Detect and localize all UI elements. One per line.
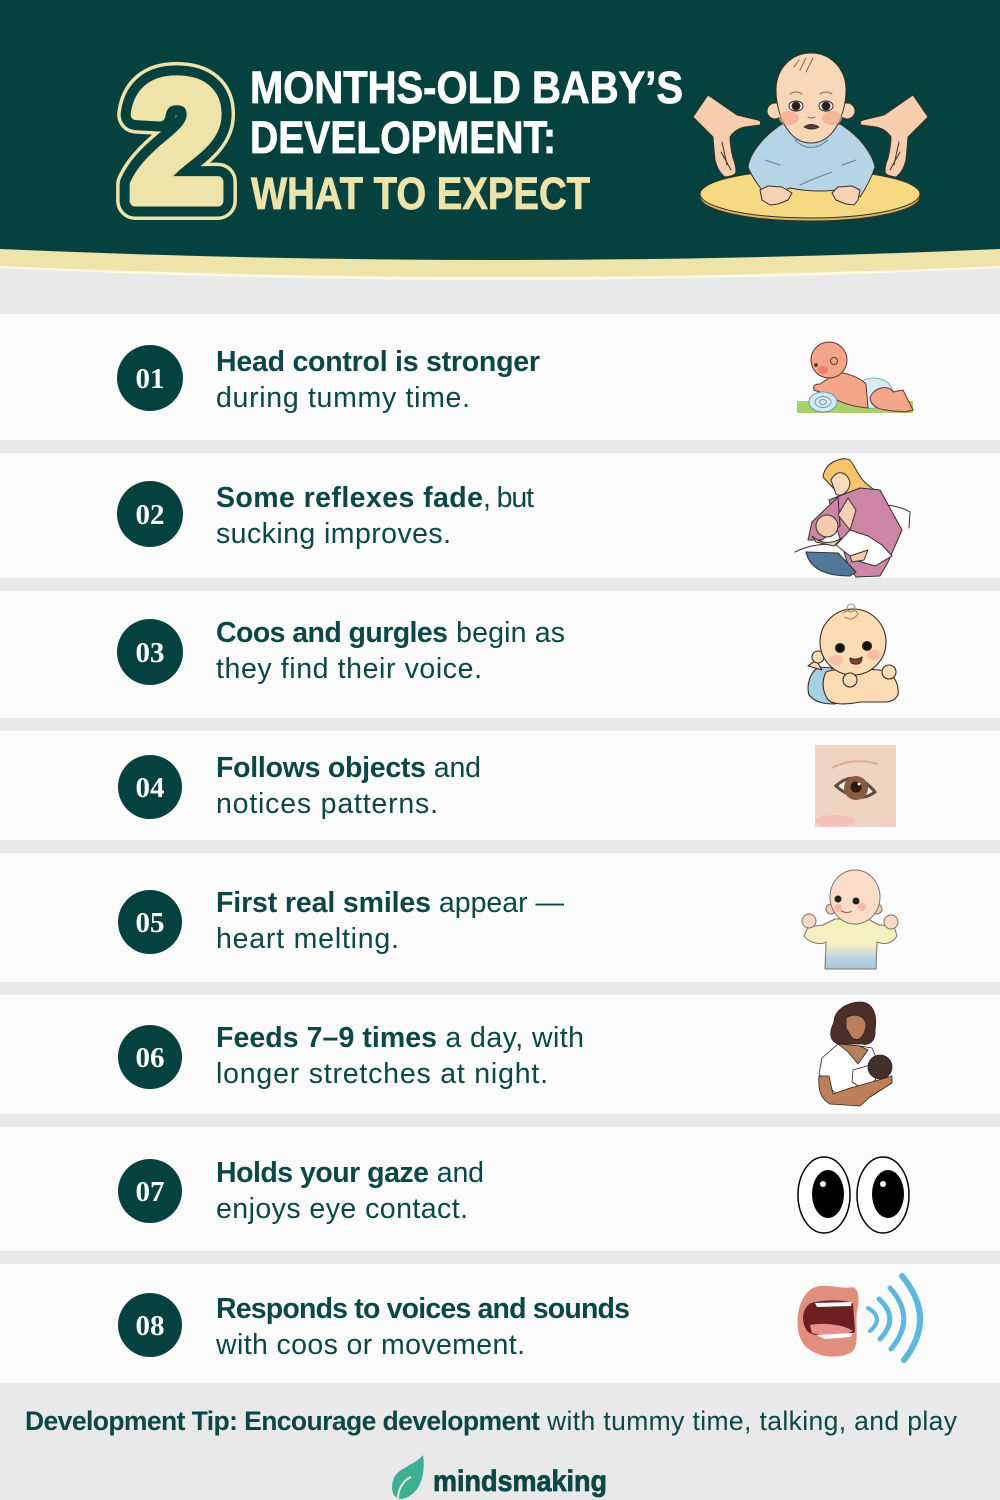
title xyxy=(250,62,683,219)
badge 04 xyxy=(118,755,182,819)
text 8: with coos or movement. xyxy=(215,1329,525,1361)
item 8 xyxy=(0,1264,1000,1383)
logo: mindsmaking xyxy=(392,1455,607,1499)
icon: open mouth with sound waves xyxy=(798,1276,920,1360)
development tip: Development Tip: Encourage development xyxy=(25,1406,540,1436)
text 4: and xyxy=(426,752,481,784)
big number 2: 2 xyxy=(129,46,225,238)
item 6 xyxy=(0,995,1000,1114)
text 5: appear — xyxy=(431,887,564,919)
text 7: and xyxy=(429,1157,484,1189)
badge 03 xyxy=(117,619,183,685)
item 7 xyxy=(0,1127,1000,1251)
logo: mindsmaking: mindsmaking xyxy=(433,1465,607,1498)
icon: cooing baby xyxy=(808,604,898,704)
badge 06: 06 xyxy=(136,1042,164,1074)
badge 02 xyxy=(117,481,183,547)
item 1 xyxy=(0,314,1000,440)
text 1: Head control is stronger xyxy=(216,346,540,378)
icon: cartoon eyes xyxy=(798,1157,909,1233)
big number 2: 2 xyxy=(129,46,225,238)
text 8: Responds to voices and sounds xyxy=(216,1293,630,1325)
item 2 xyxy=(0,453,1000,578)
title: WHAT TO EXPECT xyxy=(251,168,590,219)
badge 01 xyxy=(117,345,183,411)
badge 07 xyxy=(118,1159,182,1223)
title: DEVELOPMENT: xyxy=(250,112,556,163)
badge 05: 05 xyxy=(136,907,164,939)
text 2: sucking improves. xyxy=(216,518,451,550)
text 3: they find their voice. xyxy=(216,653,482,685)
icon: smiling baby with raised hands xyxy=(802,870,898,969)
text 7: Holds your gaze xyxy=(216,1157,429,1189)
icon: baby on tummy with towel xyxy=(797,342,913,413)
badge 08 xyxy=(118,1293,182,1357)
text 3: begin as xyxy=(448,617,565,649)
text 6: longer stretches at night. xyxy=(216,1058,548,1090)
text 5: First real smiles xyxy=(216,887,431,919)
text 4: notices patterns. xyxy=(216,788,438,820)
illustration: baby on tummy with supporting hands xyxy=(693,53,928,221)
text 6: Feeds 7–9 times xyxy=(216,1022,437,1054)
text 1: during tummy time. xyxy=(216,382,470,414)
text 6: a day, with xyxy=(437,1022,584,1054)
badge 01: 01 xyxy=(136,363,164,395)
development tip: with tummy time, talking, and play xyxy=(546,1406,958,1436)
badge 02: 02 xyxy=(136,499,164,531)
badge 04: 04 xyxy=(136,772,164,804)
item 5 xyxy=(0,853,1000,982)
badge 07: 07 xyxy=(136,1176,164,1208)
badge 08: 08 xyxy=(136,1310,164,1342)
icon: mother nursing baby xyxy=(819,1002,892,1106)
text 3: Coos and gurgles xyxy=(216,617,448,649)
text 2: , but xyxy=(483,482,534,514)
text 2: Some reflexes fade xyxy=(216,482,483,514)
icon: close-up baby eye xyxy=(815,745,896,827)
text 5: heart melting. xyxy=(216,923,399,955)
icon: mother breastfeeding xyxy=(795,459,910,577)
item 3 xyxy=(0,591,1000,718)
item 4 xyxy=(0,731,1000,840)
header banner xyxy=(0,0,1000,280)
badge 03: 03 xyxy=(136,637,164,669)
text 4: Follows objects xyxy=(216,752,426,784)
badge 05 xyxy=(118,890,182,954)
big number 2: 2 xyxy=(129,46,225,238)
text 7: enjoys eye contact. xyxy=(216,1193,468,1225)
badge 06 xyxy=(118,1025,182,1089)
title: MONTHS-OLD BABY’S xyxy=(250,62,683,113)
